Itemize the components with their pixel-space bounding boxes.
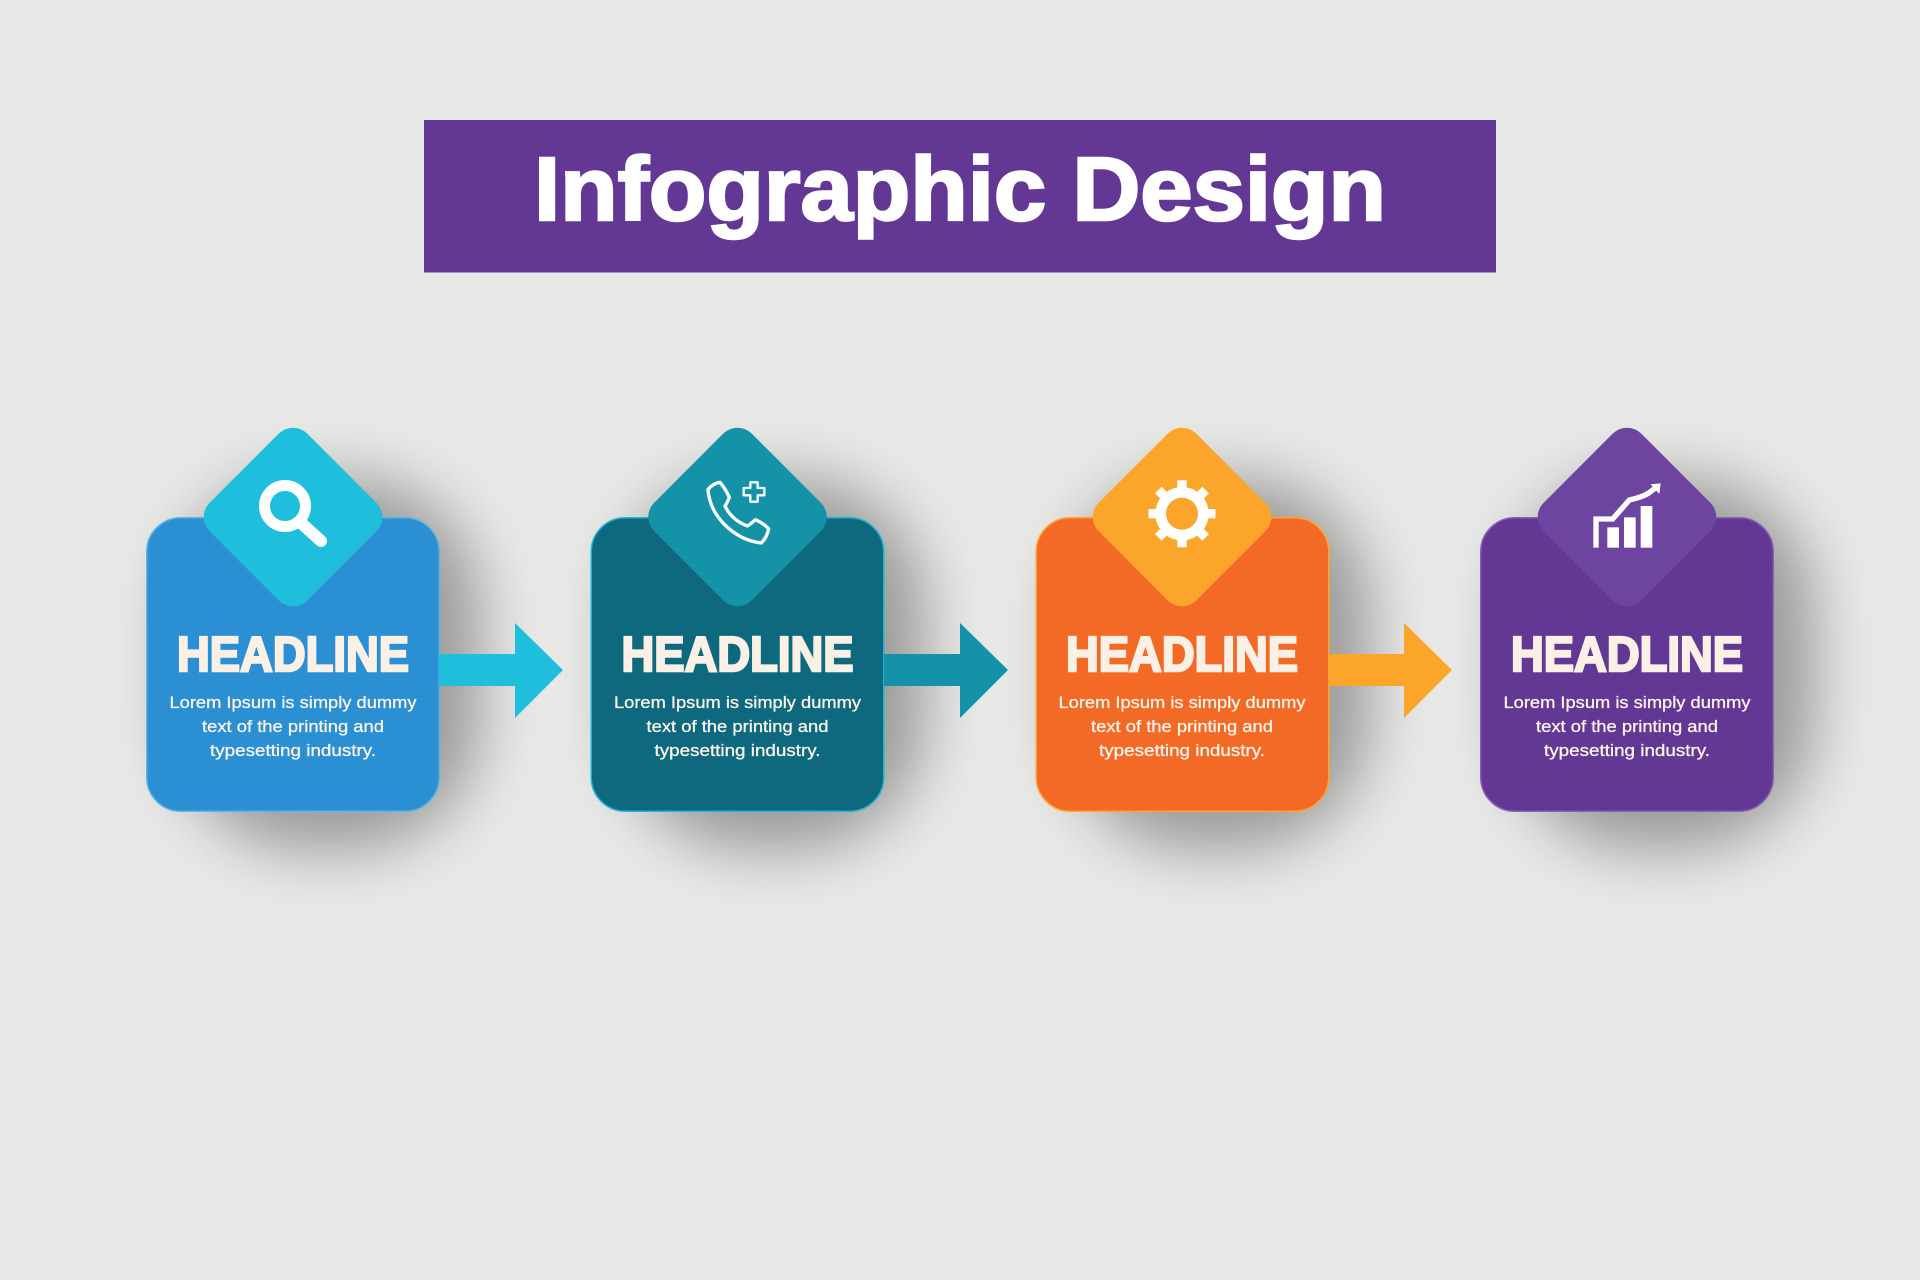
body text: step 2 (614, 693, 862, 760)
body text: step 4 (1504, 693, 1751, 760)
headline: step 4: HEADLINE (1511, 628, 1743, 682)
icon: growth chart (1596, 483, 1661, 548)
arrow: step 2 to 3 (884, 623, 1008, 718)
body text: step 1 (170, 693, 417, 760)
title text: Infographic Design (534, 140, 1386, 240)
body text: step 2: text of the printing and (646, 717, 828, 736)
body text: step 2: Lorem Ipsum is simply dummy (614, 693, 862, 712)
diamond: step 1 (195, 419, 391, 615)
arrow: step 1 to 2 (439, 623, 563, 718)
title banner (424, 120, 1496, 272)
panel: step 4 (1481, 419, 1814, 850)
body text: step 4: typesetting industry. (1544, 741, 1710, 760)
body text: step 4: text of the printing and (1536, 717, 1718, 736)
arrow: step 3 to 4 (1329, 623, 1452, 718)
icon: gear (1148, 480, 1216, 547)
body text: step 2: typesetting industry. (654, 741, 820, 760)
body text: step 3: typesetting industry. (1099, 741, 1265, 760)
body text: step 3 (1058, 693, 1306, 760)
body text: step 1: text of the printing and (202, 717, 384, 736)
diamond: step 4 (1529, 419, 1725, 615)
headline: step 1: HEADLINE (177, 628, 409, 682)
body text: step 4: Lorem Ipsum is simply dummy (1504, 693, 1751, 712)
body text: step 3: Lorem Ipsum is simply dummy (1058, 693, 1306, 712)
panel: step 1 (147, 419, 480, 850)
body text: step 1: typesetting industry. (210, 741, 376, 760)
body text: step 1: Lorem Ipsum is simply dummy (170, 693, 417, 712)
diamond: step 2 (640, 419, 835, 615)
panel: step 2 (591, 419, 925, 850)
panel: step 3 (1036, 419, 1370, 850)
icon: magnifier (264, 486, 321, 541)
headline: step 2: HEADLINE (622, 628, 854, 682)
icon: phone with plus (708, 482, 769, 543)
diamond: step 3 (1084, 419, 1280, 615)
body text: step 3: text of the printing and (1091, 717, 1273, 736)
headline: step 3: HEADLINE (1066, 628, 1298, 682)
